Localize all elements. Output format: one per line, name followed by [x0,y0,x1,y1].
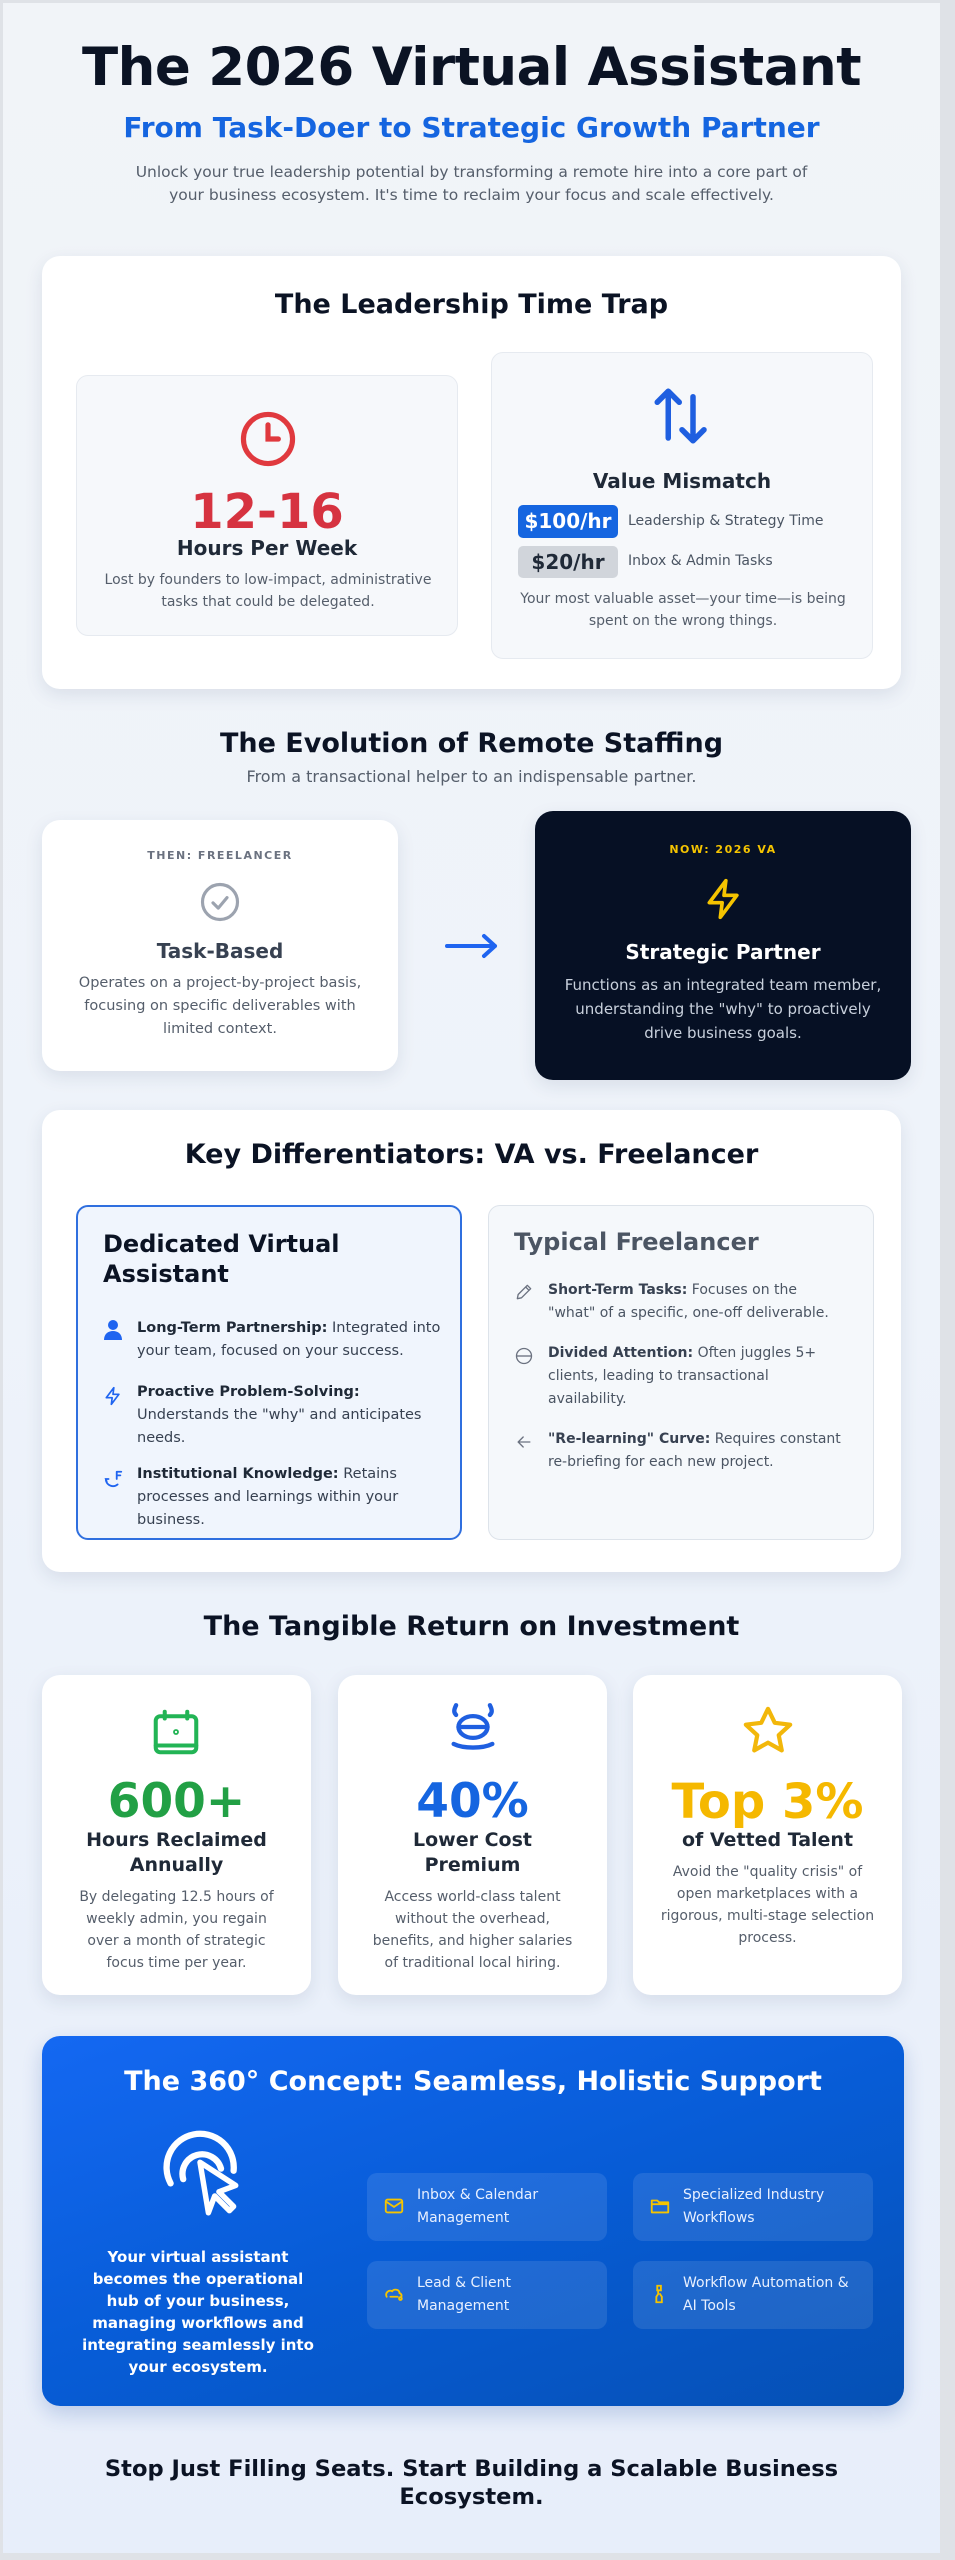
panel: 360 concept: The 360° Concept: Seamless, Holistic Support [124,2066,822,2097]
desc: Lost by founders to low-impact, administrative tasks that could be delegated. [105,572,431,610]
heading: The Leadership Time Trap [275,289,668,320]
card: then freelancer: Operates on a project-by-project basis, focusing on specific deliverables with limited context. [79,975,361,1037]
tile: automation: AI Tools [683,2298,736,2314]
card: now 2026 VA: Functions as an integrated team member, understanding the "why" to proactively drive business goals. [565,976,881,1042]
card: 600+ hours [42,1675,311,1995]
tile: lead & client: Management [417,2298,509,2314]
subcard: hours lost [76,375,458,636]
card: 600+ hours: 600+ [108,1774,245,1829]
item: divided attention: Divided Attention: Often juggles 5+ clients, leading to transactional availability. [548,1345,816,1407]
subheading: From a transactional helper to an indispensable partner. [247,767,696,786]
icon: calendar [154,1710,198,1754]
panel: key differentiators: Key Differentiators: VA vs. Freelancer [185,1139,758,1170]
panel: leadership time trap [42,256,901,689]
item: short-term: Short-Term Tasks: Focuses on the "what" of a specific, one-off deliverable. [548,1282,829,1321]
title: The 2026 Virtual Assistant [82,37,861,98]
tile: automation [633,2261,873,2329]
card: 40% [338,1675,607,1995]
tile: specialized [633,2173,873,2241]
icon: lightning [707,878,739,920]
card: now 2026 VA [535,811,911,1080]
subcard: value mismatch [491,352,873,659]
box: typical freelancer [488,1205,874,1540]
card: 600+ hours: Annually [130,1854,223,1876]
card: now 2026 VA: Strategic Partner [625,940,821,964]
box: dedicated VA: Dedicated Virtual Assistant [103,1230,340,1288]
rate row 1: $100/hr [524,509,612,533]
panel: key differentiators [42,1110,901,1572]
item: institutional knowledge: Institutional Knowledge: Retains processes and learnings within your business. [137,1466,398,1528]
icon: star [744,1706,792,1752]
subcard: value mismatch: Leadership & Strategy Time [628,513,823,529]
item: proactive: Proactive Problem-Solving: Understands the "why" and anticipates needs. [137,1384,422,1446]
box: typical freelancer: Typical Freelancer [514,1228,759,1256]
icon: clock [240,412,296,466]
heading: ROI: The Tangible Return on Investment [204,1611,739,1642]
heading: Value Mismatch [593,469,771,493]
item: relearning: "Re-learning" Curve: Requires constant re-briefing for each new project. [548,1431,841,1470]
rate row 1 [518,505,618,538]
card: 40%: Premium [425,1854,520,1876]
tile: inbox: Management [417,2210,509,2226]
subtitle: From Task-Doer to Strategic Growth Partner [123,111,820,144]
card: top 3%: Avoid the "quality crisis" of open marketplaces with a rigorous, multi-stage selection process. [661,1864,874,1946]
footer callout: Stop Just Filling Seats. Start Building a Scalable Business Ecosystem. [105,2456,838,2510]
intro text: Unlock your true leadership potential by transforming a remote hire into a core part of your business ecosystem. It's time to reclaim your focus and scale effectively. [136,163,807,204]
stat 12-16: 12-16 [190,484,344,540]
tile: automation: Workflow Automation & [683,2275,849,2291]
rate row 2: $20/hr [531,550,605,574]
hub text: Your virtual assistant becomes the operational hub of your business, managing workflows and integrating seamlessly into your ecosystem. [82,2248,314,2376]
tile: inbox: Inbox & Calendar [417,2187,538,2203]
card: 40%: Access world-class talent without the overhead, benefits, and higher salaries of traditional local hiring. [373,1889,572,1971]
card: now 2026 VA: NOW: 2026 VA [669,843,777,856]
card: 40%: Lower Cost [413,1829,532,1851]
card: top 3%: Top 3% [672,1774,863,1830]
tile: lead & client [367,2261,607,2329]
panel: 360 concept [42,2036,904,2406]
icon: check circle [200,882,240,922]
card: top 3% [633,1675,902,1995]
box: dedicated VA [76,1205,462,1540]
icon: globe [452,1703,494,1750]
card: then freelancer: THEN: FREELANCER [147,849,293,862]
card: 40%: 40% [416,1774,529,1829]
tile: specialized: Workflows [683,2210,755,2226]
card: then freelancer [42,820,398,1071]
icon: cursor with signal [163,2130,238,2216]
item: long-term: Long-Term Partnership: Integrated into your team, focused on your success. [137,1320,440,1359]
card: 600+ hours: Hours Reclaimed [86,1829,267,1851]
tile: inbox [367,2173,607,2241]
tile: specialized: Specialized Industry [683,2187,824,2203]
arrow [445,934,498,958]
subcard: value mismatch: Inbox & Admin Tasks [628,553,773,569]
heading: evolution: The Evolution of Remote Staffing [220,728,723,759]
label: Hours Per Week [177,536,357,560]
footer text: Your most valuable asset—your time—is being spent on the wrong things. [520,591,846,629]
icon: arrows [654,388,707,444]
card: then freelancer: Task-Based [157,939,283,963]
rate row 2 [518,546,618,578]
card: top 3%: of Vetted Talent [682,1829,853,1851]
tile: lead & client: Lead & Client [417,2275,511,2291]
card: 600+ hours: By delegating 12.5 hours of weekly admin, you regain over a month of strategic focus time per year. [79,1889,274,1971]
